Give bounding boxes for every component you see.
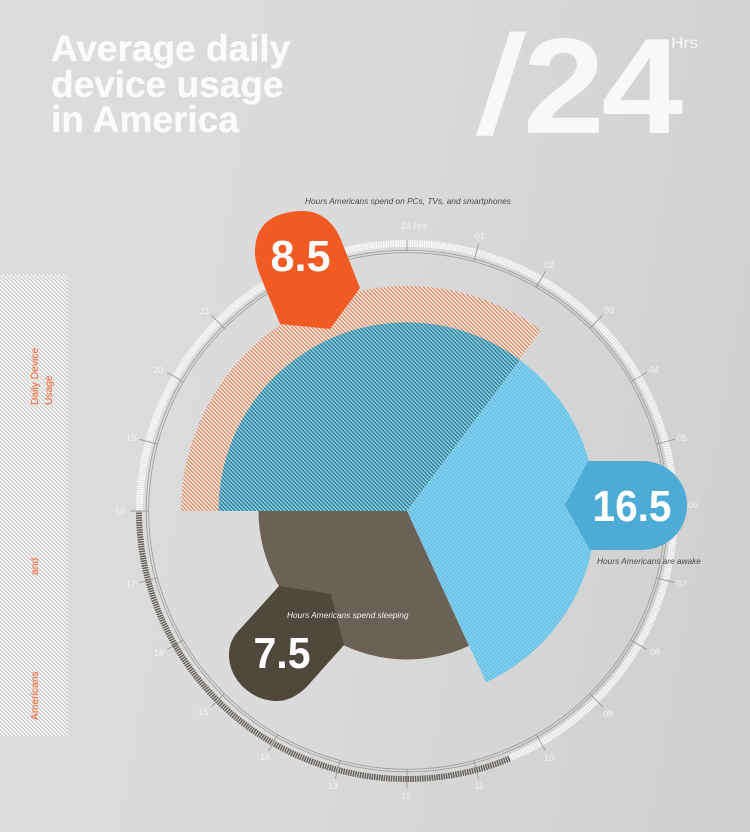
side panel: legend strip (0, 274, 68, 736)
hour labels: 10 (544, 753, 554, 763)
clock dial (115, 221, 698, 801)
hour labels: 07 (677, 579, 687, 589)
hour labels: 15 (198, 707, 208, 717)
hour labels: 20 (153, 365, 163, 375)
hour labels (115, 221, 698, 801)
heading: /24 Hrs (471, 7, 698, 163)
caption: sleeping hours: Hours Americans spend sleeping (287, 610, 409, 620)
callout: 16.5: 16.5 (592, 482, 672, 531)
callout: 8.5 (255, 211, 360, 329)
hour labels: 05 (677, 433, 687, 443)
title: in America (51, 99, 239, 140)
heading: /24 Hrs: 24 (523, 10, 682, 162)
hour labels: 06 (688, 500, 698, 510)
heading: /24 Hrs: Hrs (671, 35, 698, 52)
hour labels: 01 (475, 231, 485, 241)
sector: awake 16.5 hours (407, 360, 596, 682)
side label: and: and (30, 558, 41, 575)
hour labels: 04 (649, 365, 659, 375)
title: device usage (51, 64, 283, 105)
hour labels: 14 (260, 752, 270, 762)
hour labels: 18 (115, 506, 125, 516)
callout: 8.5: 8.5 (270, 232, 330, 281)
side label: Usage: Usage (44, 375, 55, 405)
hour labels: 11 (474, 781, 484, 791)
hour labels: 24 Hrs (401, 221, 428, 231)
hour labels: 12 (401, 791, 411, 801)
side label: Americans: Americans (30, 671, 41, 720)
white tick band: 16.5 waking hours (139, 243, 674, 758)
heading: /24 Hrs: / (471, 7, 531, 163)
callout: 16.5 (565, 461, 687, 550)
caption: awake hours: Hours Americans are awake (597, 556, 701, 566)
hour labels: 03 (604, 305, 614, 315)
title: Average daily (51, 28, 291, 69)
sector: device usage 8.5 hours (181, 286, 541, 511)
sector: overlap of device usage and awake (218, 322, 520, 511)
hour ticks (130, 240, 675, 788)
ring lines (146, 250, 668, 772)
hour labels: 17 (126, 579, 136, 589)
hour labels: 13 (328, 781, 338, 791)
sector: sleeping 7.5 hours (258, 511, 469, 659)
dark tick band: 7.5 sleeping hours (139, 511, 510, 779)
hour labels: 02 (544, 260, 554, 270)
radial chart (181, 286, 596, 682)
hour labels: 21 (200, 306, 210, 316)
hour labels: 16 (154, 648, 164, 658)
callout: 7.5 (229, 586, 344, 701)
callout: 7.5: 7.5 (254, 629, 310, 678)
side label: Daily Device: Daily Device (30, 348, 41, 405)
title (51, 28, 291, 140)
hour labels: 08 (650, 647, 660, 657)
hour labels: 09 (603, 709, 613, 719)
hour labels: 19 (126, 433, 136, 443)
caption: device hours: Hours Americans spend on PCs, TVs, and smartphones (305, 196, 511, 206)
